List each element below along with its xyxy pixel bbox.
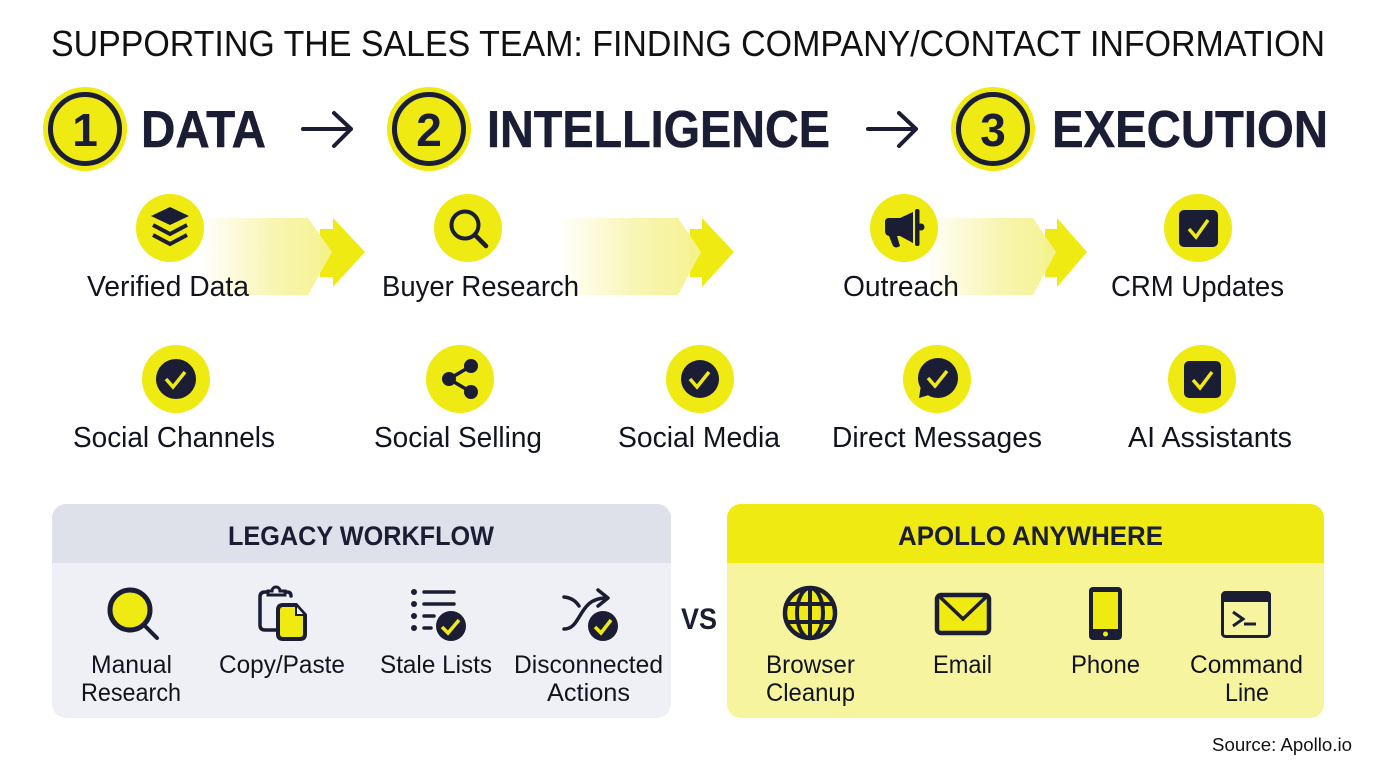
panel background [52,504,671,718]
item: social selling [374,345,542,454]
icon: check circle [666,345,734,413]
label: Direct Messages [832,422,1042,454]
item: stale lists [380,589,492,679]
label: Social Media [618,422,780,454]
icon: step number 2: 2 [416,104,442,156]
icon: check circle [142,345,210,413]
icon: terminal [1222,591,1271,636]
item: social media [618,345,780,454]
item: direct messages [832,345,1042,454]
label: Verified Data [87,271,249,303]
label line 2: Research [81,679,181,707]
item: outreach [843,194,959,303]
label line 2: Line [1225,679,1269,707]
label: Command [1190,651,1303,679]
label: Social Channels [73,422,275,454]
icon: smartphone [1089,587,1122,640]
item: command line [1190,591,1303,707]
panel heading: APOLLO ANYWHERE [898,521,1163,551]
icon: step number 1: 1 [72,104,98,156]
label: Disconnected [514,651,663,679]
icon: step number 1 [43,87,127,171]
icon: megaphone [870,194,938,262]
icon: checkbox [1164,194,1232,262]
item: browser cleanup [766,588,855,707]
label: Browser [766,651,855,679]
arrow: intelligence to execution [868,113,916,146]
icon: envelope [937,595,989,633]
item: buyer research [382,194,579,303]
item: manual research [81,590,181,707]
label: Stale Lists [380,651,492,679]
item: crm updates [1111,194,1284,303]
panel: legacy workflow [52,504,671,718]
icon: checkbox [1168,345,1236,413]
arrow: buyer research to outreach [558,218,734,295]
label line 2: Actions [547,679,630,707]
label: Manual [91,651,172,679]
icon: checklist [411,589,466,641]
label: Social Selling [374,422,542,454]
icon: clipboard and document [260,587,305,639]
icon: magnifier [434,194,502,262]
step 1: data [43,87,266,171]
arrow: data to intelligence [303,113,351,146]
label: CRM Updates [1111,271,1284,303]
icon: chat bubble [903,345,971,413]
label line 2: Cleanup [766,679,855,707]
label: Phone [1071,651,1140,679]
arrow: outreach to crm updates [925,218,1087,295]
item: phone [1071,587,1140,679]
item: verified data [87,194,249,303]
step 3: execution [951,87,1328,171]
heading: execution: EXECUTION [1052,101,1328,159]
icon: step number 2 [387,87,471,171]
item: disconnected actions [514,590,663,707]
icon: layers [136,194,204,262]
label: AI Assistants [1128,422,1292,454]
panel heading: LEGACY WORKFLOW [228,521,494,551]
heading: intelligence: INTELLIGENCE [487,101,830,159]
item: copy/paste [219,587,345,679]
panel background [727,504,1324,718]
step 2: intelligence [387,87,830,171]
icon: magnifier [110,590,157,638]
icon: share [426,345,494,413]
icon: shuffle with check [564,590,618,641]
label: Copy/Paste [219,651,345,679]
label: Outreach [843,271,959,303]
label: Buyer Research [382,271,579,303]
panel: apollo anywhere [727,504,1324,718]
item: social channels [73,345,275,454]
vs label: VS [681,603,717,636]
icon: step number 3 [951,87,1035,171]
title: SUPPORTING THE SALES TEAM: FINDING COMPANY/CONTACT INFORMATION [51,23,1325,64]
source note: Source: Apollo.io [1212,735,1352,755]
arrow: verified data to buyer research [200,218,365,295]
item: ai assistants [1128,345,1292,454]
heading: data: DATA [141,101,266,159]
item: email [933,595,992,679]
icon: step number 3: 3 [980,104,1006,156]
icon: globe [785,588,835,638]
label: Email [933,651,992,679]
